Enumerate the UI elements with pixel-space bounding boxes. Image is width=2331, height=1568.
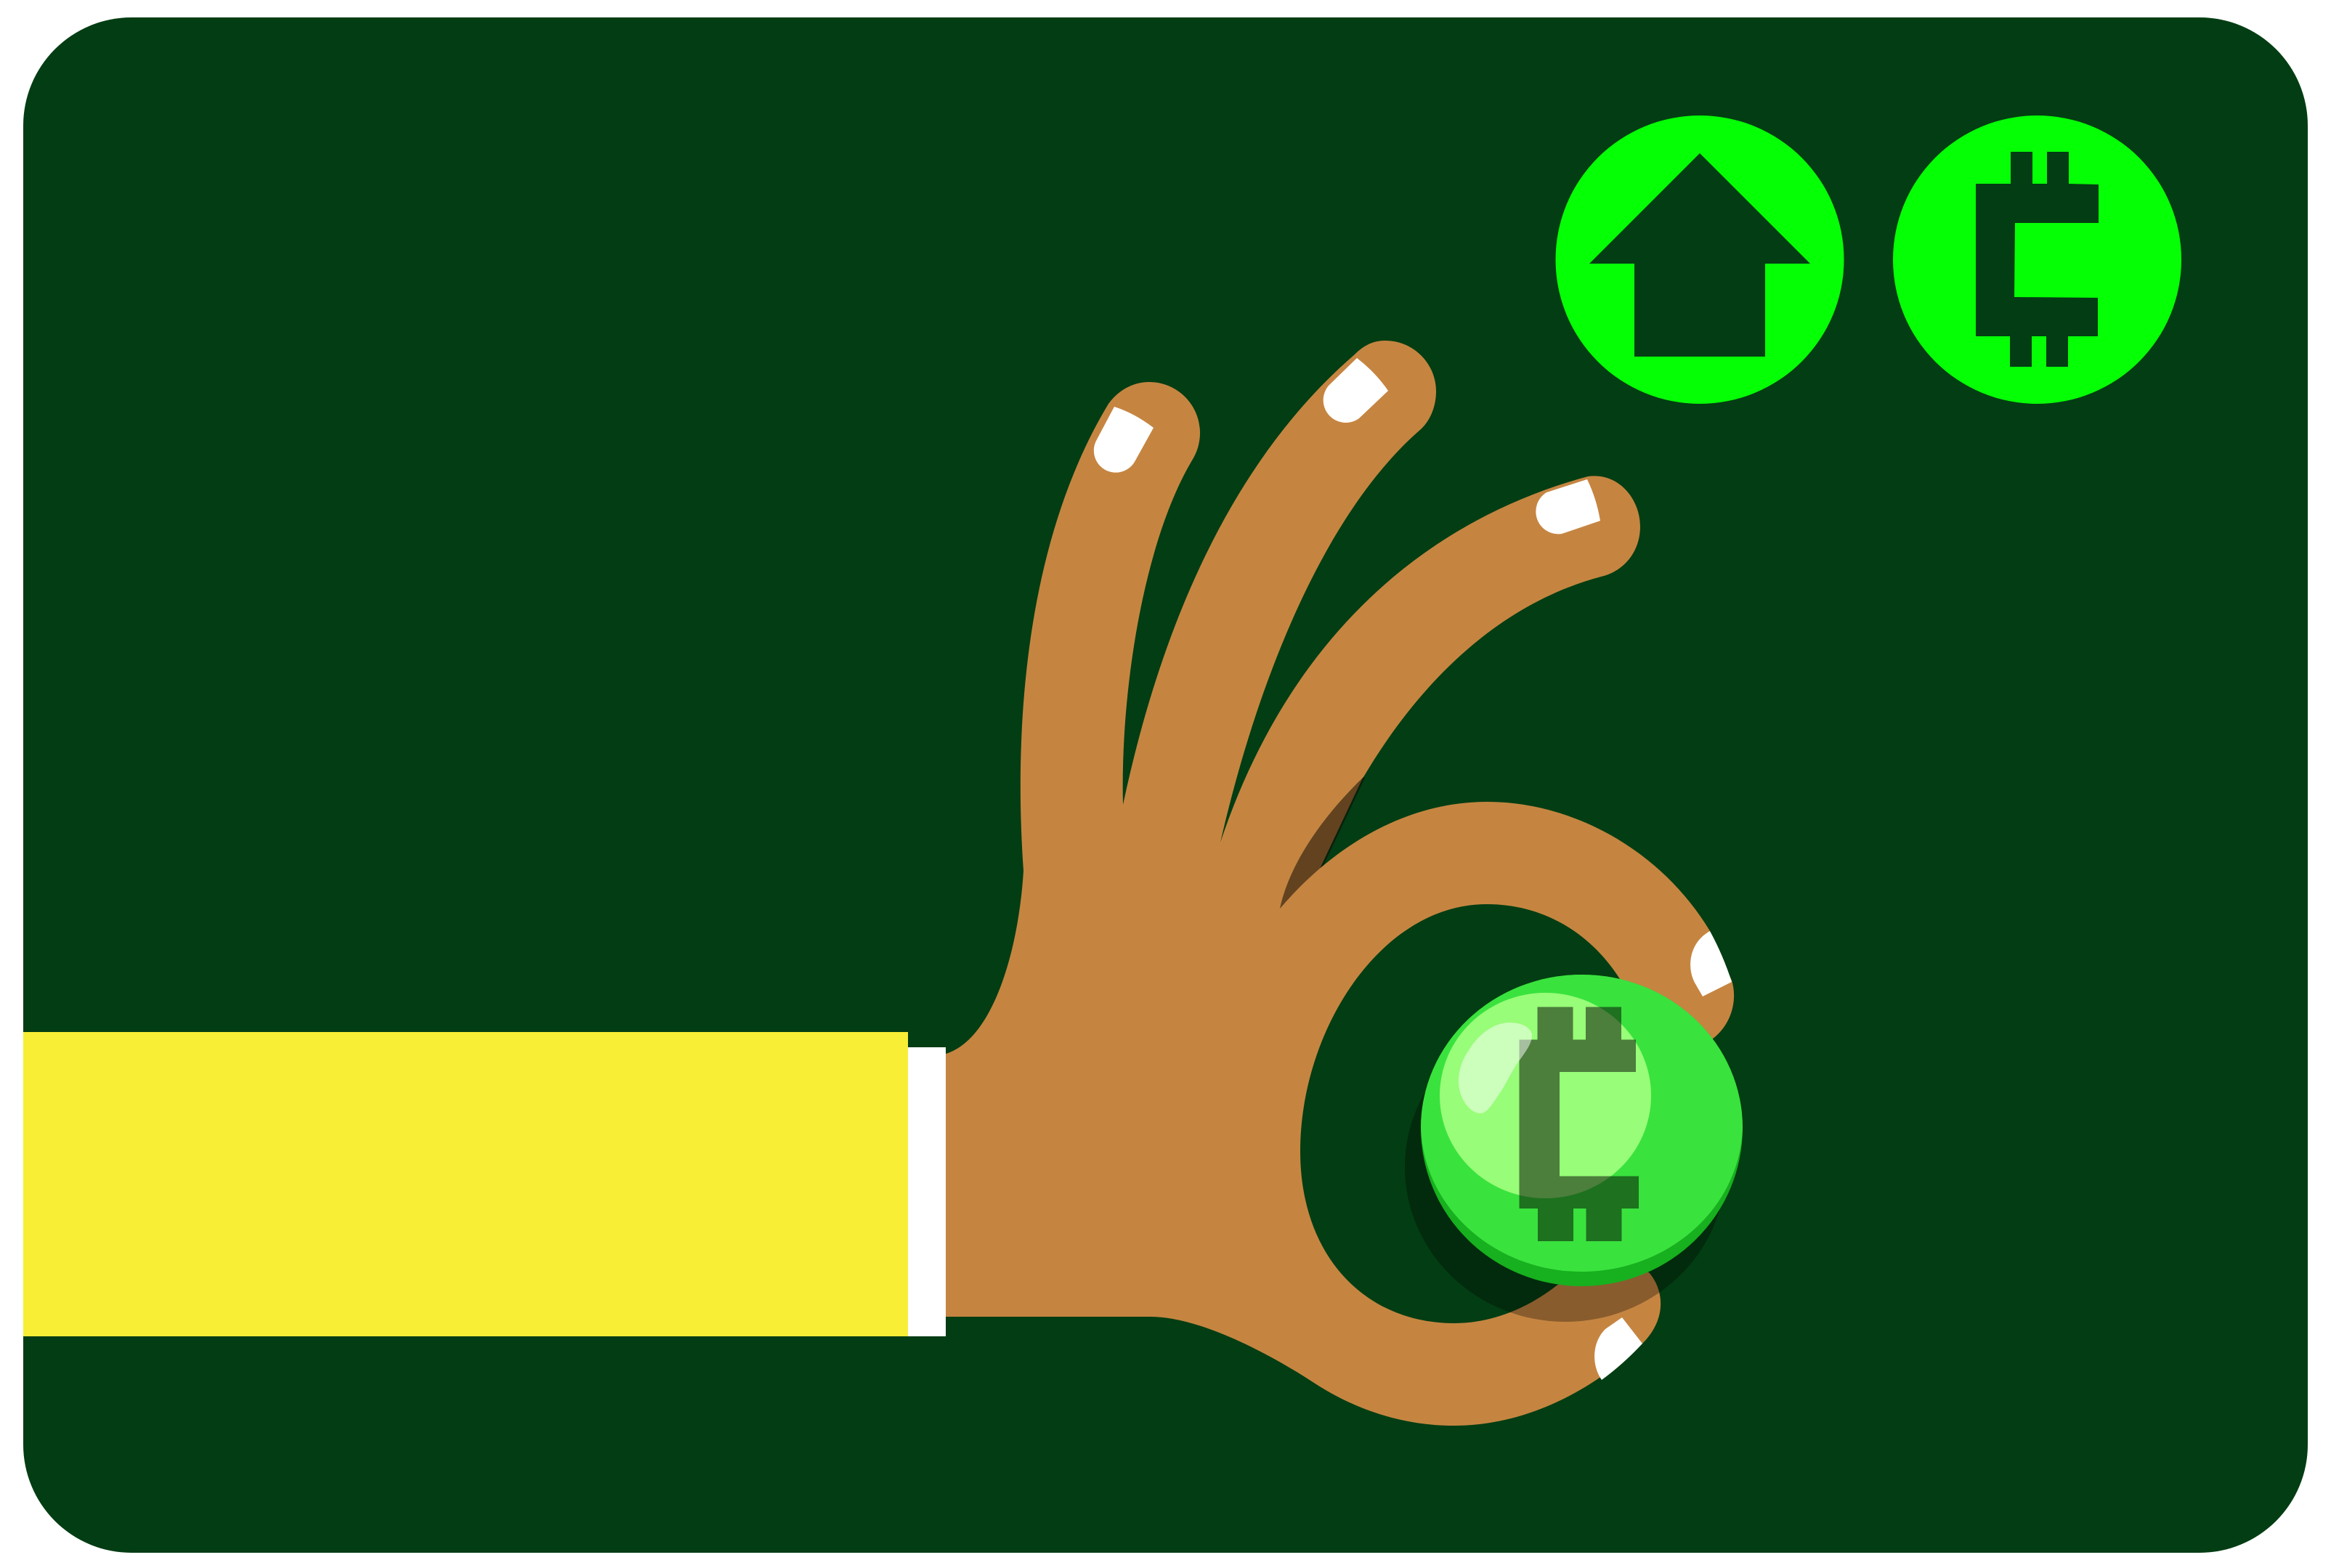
shirt cuff: white xyxy=(908,1047,946,1336)
nail: index finger xyxy=(1690,931,1732,996)
coin symbol xyxy=(1520,1007,1639,1241)
coin held between finger and thumb xyxy=(1421,975,1743,1286)
nail: middle finger xyxy=(1323,358,1388,423)
shadow: crease between ring finger and index finger xyxy=(1280,777,1364,909)
nail: pinky xyxy=(1094,407,1154,473)
nail: thumb xyxy=(1594,1317,1642,1380)
icon: green circle with up arrow xyxy=(1556,115,1844,404)
sleeve: yellow xyxy=(23,1032,908,1336)
nail: ring finger xyxy=(1536,479,1600,534)
coin edge xyxy=(1421,975,1743,1286)
coin face xyxy=(1421,975,1743,1272)
fingernails xyxy=(1094,358,1732,1380)
coin highlight xyxy=(1440,993,1651,1198)
coin glare xyxy=(1459,1023,1532,1113)
coin shadow xyxy=(1405,1012,1726,1322)
icon: green circle with coin symbol xyxy=(1893,115,2181,404)
hand xyxy=(946,341,1734,1426)
